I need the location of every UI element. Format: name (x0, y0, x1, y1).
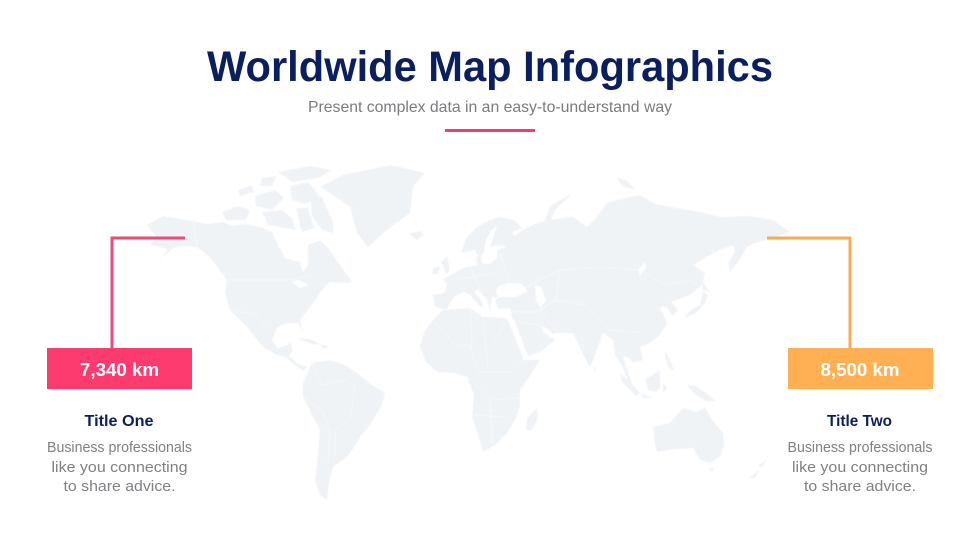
map: Greenland (320, 165, 425, 247)
map: Africa (420, 308, 540, 452)
map: Sri Lanka (593, 366, 596, 372)
left connector arrow line (112, 238, 185, 348)
map: inland seas and lakes (292, 262, 646, 392)
subtitle: Present complex data in an easy-to-understand way (308, 99, 672, 116)
map: Madagascar (526, 408, 538, 431)
right value box: 8,500 km (820, 360, 900, 380)
map: UK and Ireland (432, 256, 450, 274)
left heading: Title One (84, 413, 154, 430)
panel: left callout (47, 348, 192, 495)
right body text (788, 440, 932, 495)
map: Australia (653, 407, 724, 463)
left body text: to share advice. (64, 479, 176, 495)
map: South America (303, 360, 385, 500)
map: country borders (193, 221, 700, 465)
panel: right callout (788, 348, 933, 495)
left body text: like you connecting (52, 460, 188, 476)
map: Novaya Zemlya (545, 193, 573, 222)
right heading: Title Two (827, 413, 892, 430)
right body text: like you connecting (792, 460, 928, 476)
map: New Zealand (749, 459, 767, 478)
map: Svalbard (616, 177, 636, 190)
left body text: Business professionals (47, 440, 192, 456)
map: Philippines and Indonesia (620, 350, 717, 402)
right value box (788, 348, 933, 389)
map: Cuba and Caribbean (296, 338, 330, 349)
left value box (47, 348, 192, 389)
map: Canadian Arctic islands (222, 166, 333, 233)
map: Eurasia (433, 195, 790, 388)
right connector arrow line (767, 238, 850, 348)
left body text (47, 440, 192, 495)
right body text: to share advice. (804, 479, 916, 495)
map: Japan (684, 281, 710, 318)
left value box: 7,340 km (80, 360, 159, 380)
map: Tasmania (708, 468, 714, 472)
world map (147, 165, 790, 500)
right body text: Business professionals (788, 440, 932, 456)
title underline (445, 129, 535, 132)
map: Iceland (409, 231, 424, 240)
map: North America (147, 216, 352, 371)
title: Worldwide Map Infographics (207, 43, 773, 91)
